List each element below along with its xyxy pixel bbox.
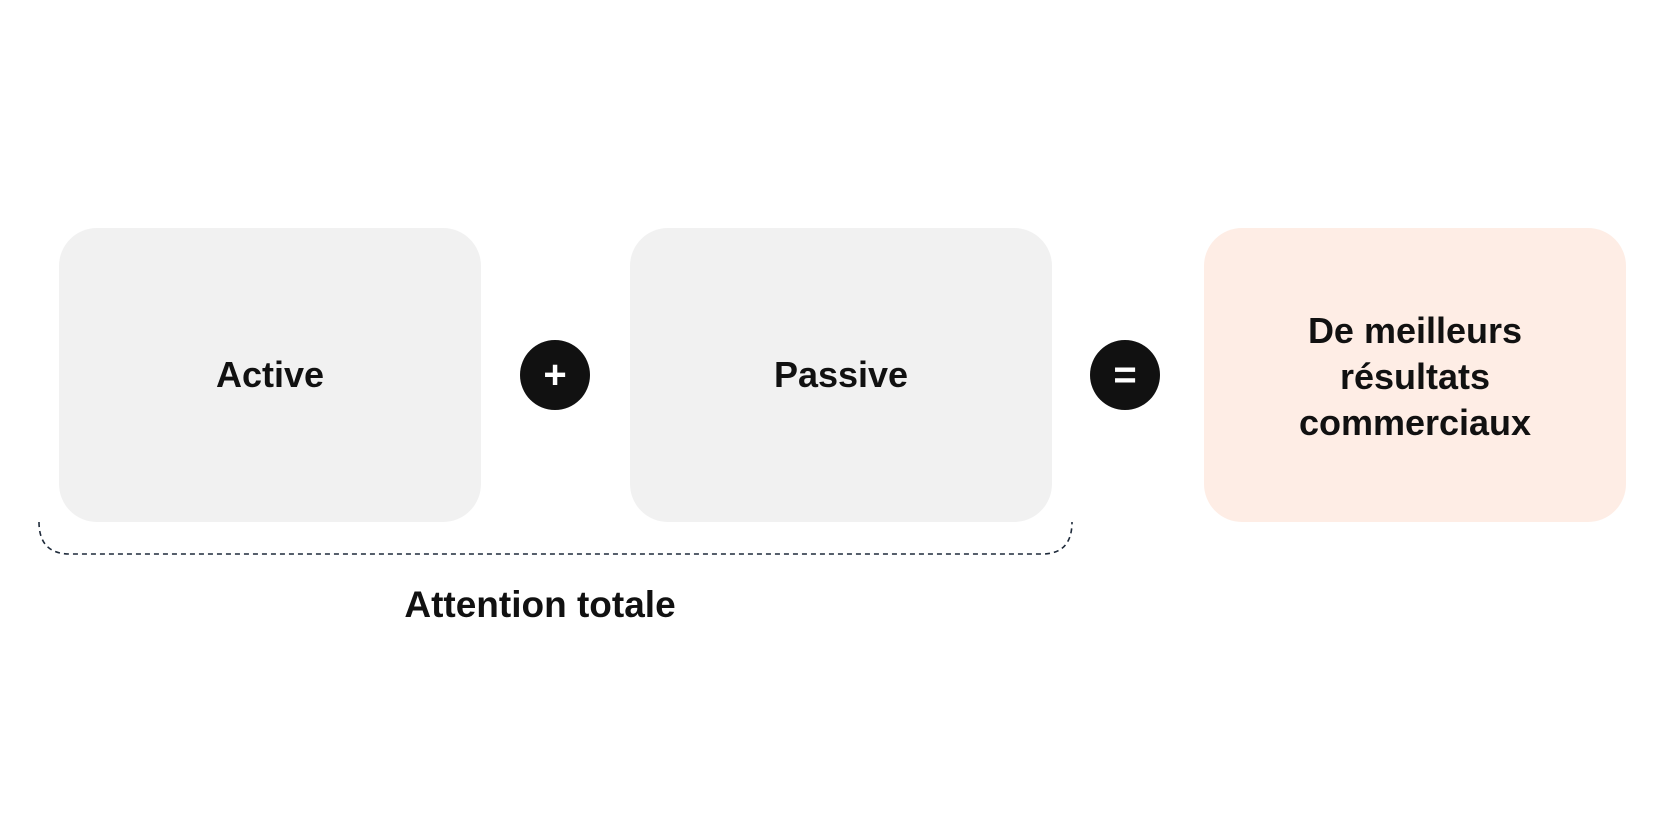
label: attention totale: Attention totale	[404, 584, 676, 625]
panel: result: commerciaux	[1299, 402, 1531, 443]
panel: passive	[630, 228, 1052, 522]
panel: passive: Passive	[774, 354, 908, 395]
icon: equals: =	[1113, 352, 1137, 396]
panel: result	[1204, 228, 1626, 522]
panel: result: résultats	[1340, 356, 1490, 397]
panel: result: De meilleurs	[1308, 310, 1522, 351]
panel: active	[59, 228, 481, 522]
icon: plus	[520, 340, 590, 410]
icon: plus: +	[543, 352, 567, 396]
panel: active: Active	[216, 354, 324, 395]
icon: equals	[1090, 340, 1160, 410]
